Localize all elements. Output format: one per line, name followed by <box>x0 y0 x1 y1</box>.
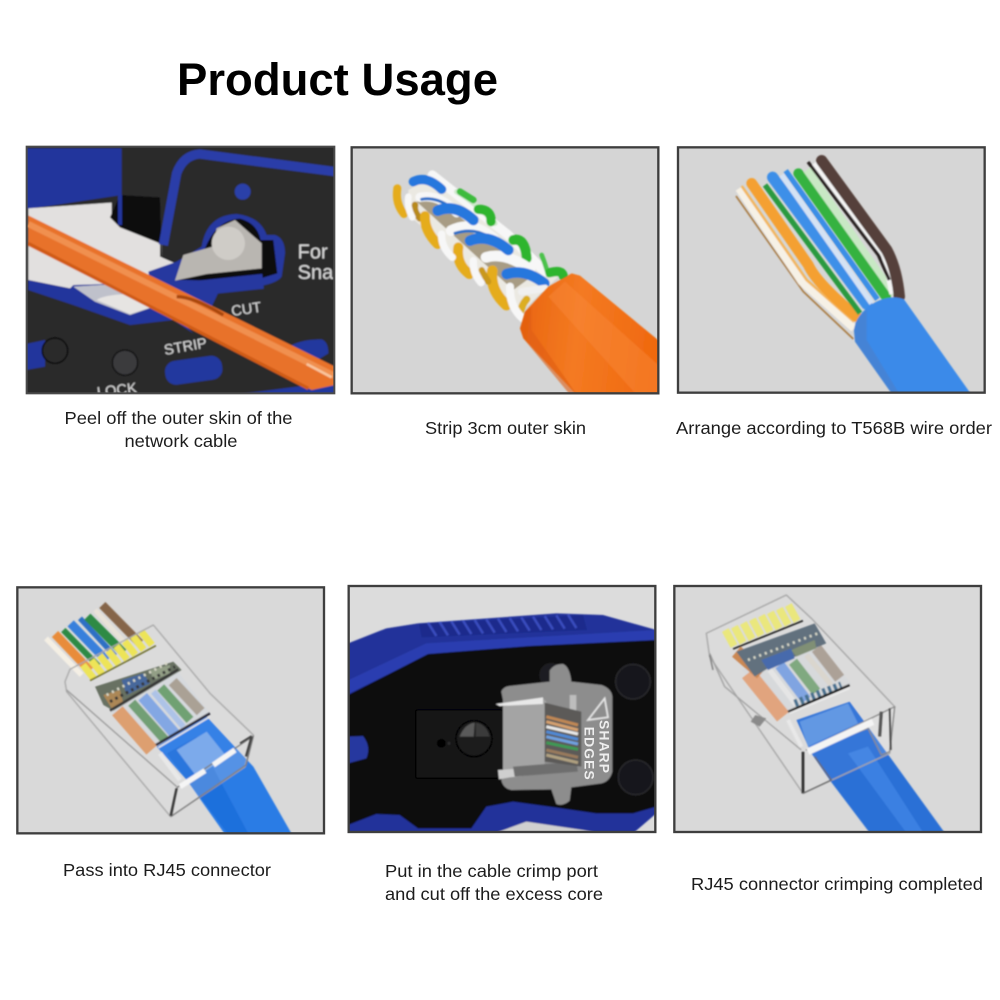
yellow contacts <box>83 632 152 678</box>
panel: completed RJ45 crimp photo <box>673 584 982 834</box>
panel: peel off outer skin photo <box>26 146 336 394</box>
plate warning label: SHARP <box>597 720 613 774</box>
panel: T568B wire order photo <box>676 146 986 394</box>
blue cable <box>854 297 972 395</box>
contact base strip <box>95 662 182 711</box>
plate warning label: EDGES <box>582 727 598 781</box>
caption: step 6: RJ45 connector crimping completed <box>691 874 983 894</box>
eight sorted wires <box>736 161 899 339</box>
tool labels <box>96 241 334 401</box>
twisted wire pairs <box>397 175 563 318</box>
panel: stripped twisted pairs photo <box>350 146 660 394</box>
crimper tool body <box>348 613 656 833</box>
panel: pass into RJ45 connector photo <box>16 586 326 834</box>
plate warning label <box>584 720 609 780</box>
blue cable <box>157 717 293 837</box>
blue cable <box>796 702 946 835</box>
orange cable <box>28 215 335 390</box>
tool labels: Sna <box>298 262 334 284</box>
tool labels: LOCK <box>96 381 138 401</box>
crimper tool body <box>26 146 335 394</box>
caption: step 4: Pass into RJ45 connector <box>63 860 271 880</box>
stripped wires in port <box>546 717 578 763</box>
tool labels: For <box>298 241 328 263</box>
contact strip <box>736 623 826 677</box>
orange cable <box>520 273 660 397</box>
tool labels: STRIP <box>163 336 208 359</box>
caption: step 2: Strip 3cm outer skin <box>425 418 586 438</box>
caption: step 1: network cable <box>124 431 238 451</box>
yellow contacts <box>725 605 797 646</box>
transparent connector housing <box>706 595 895 793</box>
caption: step 5: and cut off the excess core <box>385 884 603 904</box>
wires inside connector <box>736 643 851 717</box>
tool labels: CUT <box>230 300 262 320</box>
caption: step 5: Put in the cable crimp port <box>385 861 598 881</box>
wires entering connector <box>46 605 210 750</box>
caption: step 1: Peel off the outer skin of the <box>64 408 292 428</box>
caption: step 3: Arrange according to T568B wire order <box>676 418 992 438</box>
transparent connector housing <box>65 625 253 817</box>
title: Product Usage <box>177 54 498 105</box>
silver blade plate <box>496 664 612 805</box>
panel: crimp port photo <box>348 584 656 834</box>
